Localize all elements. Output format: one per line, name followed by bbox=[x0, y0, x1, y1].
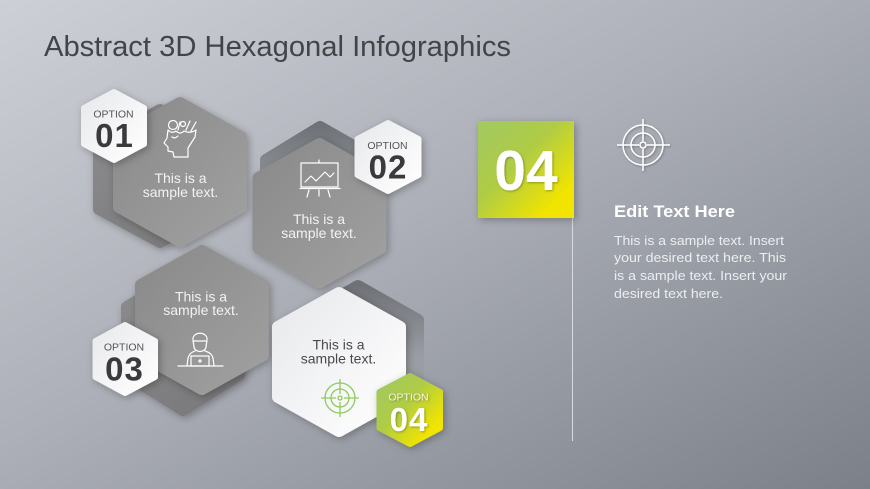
main hexagon 02 bbox=[258, 144, 380, 282]
main hexagon 03 bbox=[141, 251, 263, 389]
badge: option 04 bbox=[380, 376, 440, 444]
badge: option 02: OPTION bbox=[367, 140, 408, 152]
back hexagon 01 bbox=[99, 110, 221, 242]
back hexagon 04 bbox=[298, 286, 418, 426]
panel: option 04 bbox=[278, 286, 418, 431]
badge: option 01 bbox=[84, 92, 144, 160]
badge: option 01: 01 bbox=[95, 117, 134, 154]
number box 04: 04 bbox=[494, 139, 558, 203]
panel: option 03 bbox=[127, 251, 263, 410]
icon: head with ideas bbox=[164, 120, 196, 157]
title: Abstract 3D Hexagonal Infographics bbox=[44, 31, 511, 63]
body text: is a sample text. Insert your bbox=[614, 268, 788, 283]
panel: option 03: sample text. bbox=[163, 302, 239, 318]
body text: your desired text here. This bbox=[614, 250, 787, 265]
icon: green target bbox=[321, 379, 359, 417]
badge: option 03 bbox=[96, 325, 155, 393]
text 02: This is a bbox=[293, 211, 345, 227]
text 03: This is a bbox=[175, 288, 227, 304]
body text bbox=[614, 233, 788, 301]
panel: option 04: sample text. bbox=[301, 350, 376, 366]
icon: person at laptop bbox=[178, 333, 223, 366]
body text: This is a sample text. Insert bbox=[614, 233, 784, 248]
body text: desired text here. bbox=[614, 286, 723, 301]
icon: presentation board bbox=[300, 160, 340, 197]
vertical divider line bbox=[572, 218, 574, 441]
panel: option 02 bbox=[258, 127, 380, 282]
panel: option 01 bbox=[99, 103, 241, 242]
badge: option 01: OPTION bbox=[93, 108, 134, 120]
back hexagon 02 bbox=[266, 127, 378, 262]
heading: edit text: Edit Text Here bbox=[614, 203, 735, 221]
text 04: This is a bbox=[312, 336, 365, 352]
badge: option 03: OPTION bbox=[104, 342, 144, 354]
text 01: This is a bbox=[154, 170, 207, 186]
main hexagon 04 bbox=[278, 293, 400, 431]
badge: option 03: 03 bbox=[105, 350, 144, 388]
number box 04 bbox=[478, 121, 574, 218]
badge: option 02: 02 bbox=[369, 148, 407, 186]
panel: option 01: sample text. bbox=[143, 184, 218, 200]
panel: option 02: sample text. bbox=[281, 225, 357, 241]
badge: option 04: OPTION bbox=[388, 392, 429, 404]
badge: option 02 bbox=[358, 123, 418, 191]
icon: white target bbox=[617, 119, 670, 171]
main hexagon 01 bbox=[119, 103, 241, 241]
back hexagon 03 bbox=[127, 273, 239, 410]
badge: option 04: 04 bbox=[390, 401, 428, 438]
